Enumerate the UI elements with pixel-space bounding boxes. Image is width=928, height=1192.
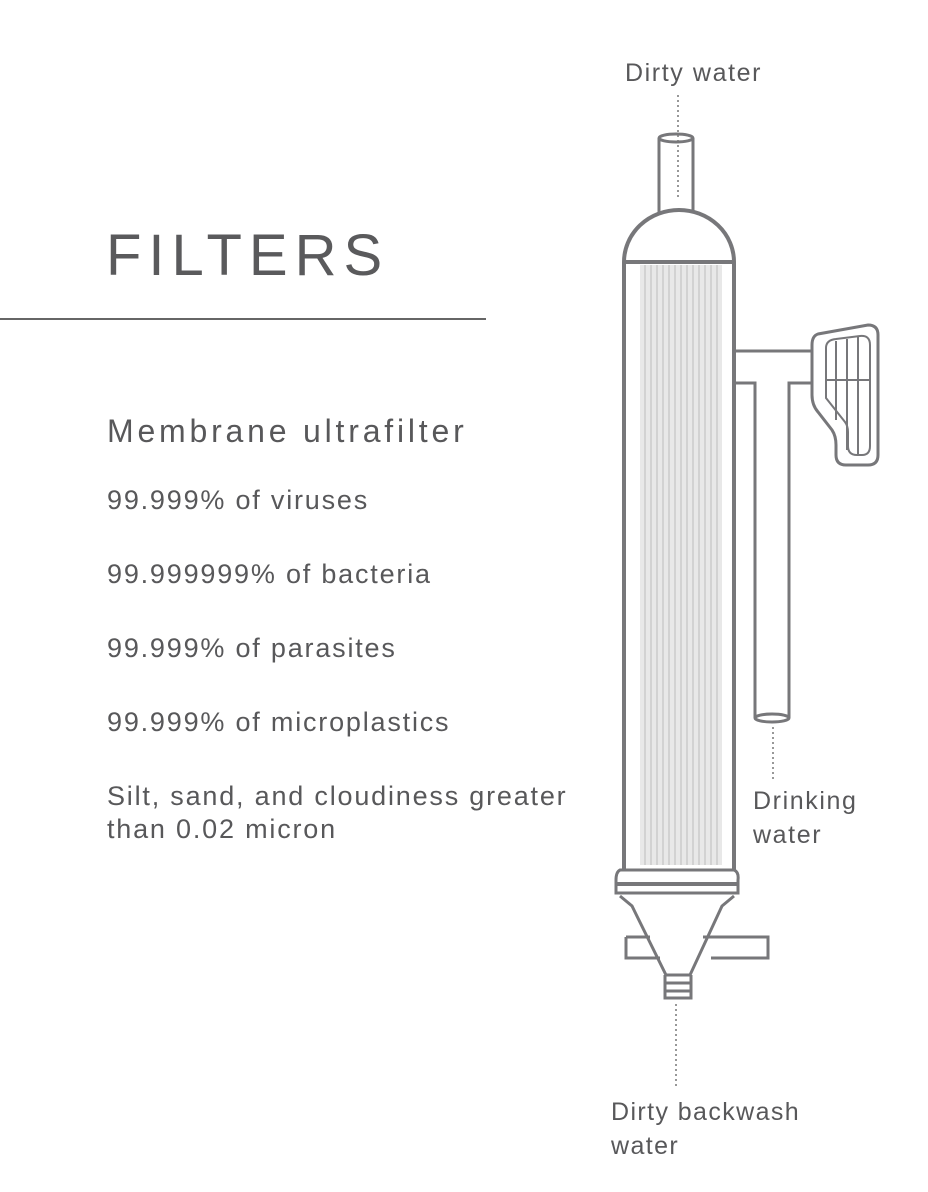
label: drinking water: Drinking (753, 787, 858, 815)
text block: filter list: 99.999999% of bacteria (107, 559, 432, 589)
label: dirty backwash water: water (611, 1132, 679, 1160)
top tube (659, 134, 693, 212)
bottom ring and cone (616, 870, 768, 998)
dotted leaders (676, 95, 773, 1088)
dome and body (624, 210, 734, 262)
fibers (640, 265, 722, 865)
heading: membrane ultrafilter: Membrane ultrafilter (107, 413, 468, 449)
label: drinking water (753, 787, 858, 849)
text block: filter list: 99.999% of microplastics (107, 707, 450, 737)
text block: filter list: 99.999% of viruses (107, 485, 369, 515)
label: dirty backwash water: Dirty backwash (611, 1098, 800, 1126)
text block: filter list: than 0.02 micron (107, 814, 337, 844)
label: dirty backwash water (611, 1098, 800, 1160)
text block: filter list (107, 485, 567, 844)
handle arm and pipe (735, 325, 878, 722)
divider line (0, 318, 486, 320)
label: dirty water: Dirty water (625, 59, 762, 87)
text block: filter list: Silt, sand, and cloudiness greater (107, 781, 567, 811)
text block: filter list: 99.999% of parasites (107, 633, 397, 663)
label: drinking water: water (753, 821, 822, 849)
title: FILTERS (106, 223, 389, 288)
